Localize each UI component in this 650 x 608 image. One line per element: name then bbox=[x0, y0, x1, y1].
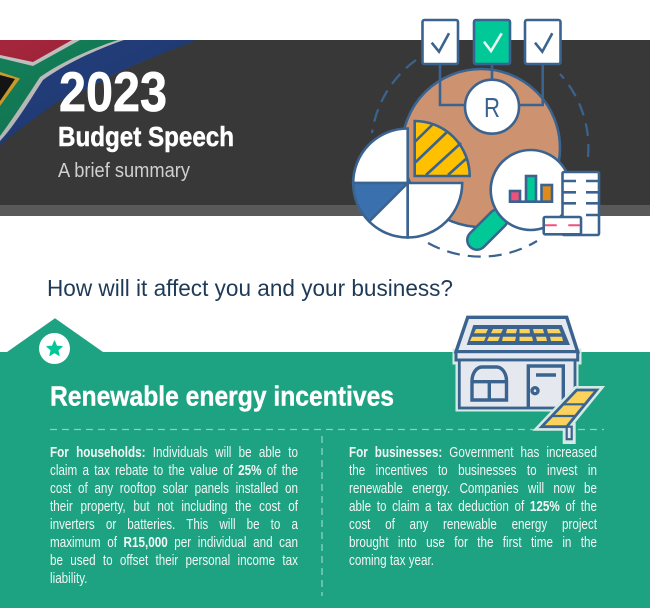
illustration: budget charts bbox=[353, 20, 599, 257]
subheading: How will it affect you and your business? bbox=[47, 275, 453, 301]
text block: businesses: coming tax year. bbox=[349, 553, 434, 569]
header band bbox=[0, 40, 650, 216]
gold hatched quarter bbox=[415, 121, 470, 176]
text block: businesses: For businesses: Government has increased bbox=[349, 445, 597, 461]
panel heading: Renewable energy incentives bbox=[50, 380, 394, 412]
text block: households: cost of any rooftop solar panels installed on bbox=[50, 481, 298, 497]
pie chart bbox=[353, 128, 462, 238]
text block: households: inverters or batteries. This will be to a bbox=[50, 517, 298, 533]
text block: businesses: able to claim a tax deduction of 125% of the bbox=[349, 499, 597, 515]
checkbox right bbox=[525, 20, 560, 64]
title: 2023: 2023 bbox=[59, 60, 167, 123]
rand circle bbox=[465, 80, 519, 134]
text block: households: their property, but not including the cost of bbox=[50, 499, 298, 515]
South African flag graphic bbox=[0, 40, 196, 145]
text block: businesses: the incentives to businesses to invest in bbox=[349, 463, 597, 479]
subtitle: A brief summary: A brief summary bbox=[58, 160, 190, 182]
tan circle bbox=[402, 69, 560, 227]
ledger table bbox=[562, 172, 599, 235]
connectors bbox=[440, 64, 543, 105]
text block: businesses: renewable energy. Companies will now be bbox=[349, 481, 597, 497]
text block: households bbox=[50, 445, 298, 587]
text block: households: liability. bbox=[50, 571, 87, 587]
text block: households: maximum of R15,000 per individual and can bbox=[50, 535, 298, 551]
icon: solar house bbox=[456, 317, 578, 408]
star badge bbox=[39, 333, 70, 364]
icon: solar panel on post bbox=[542, 390, 597, 440]
small card bbox=[544, 217, 581, 234]
text block: businesses bbox=[349, 445, 597, 569]
text block: households: be used to offset their personal income tax bbox=[50, 553, 298, 569]
bar chart bbox=[509, 176, 553, 202]
text block: households: claim a tax rebate to the value of 25% of the bbox=[50, 463, 298, 479]
title: Budget Speech: Budget Speech bbox=[58, 121, 234, 152]
text block: businesses: brought into use for the first time in the bbox=[349, 535, 597, 551]
rand circle: R bbox=[484, 92, 500, 123]
magnifier handle bbox=[477, 219, 498, 240]
teal panel with tab bbox=[0, 318, 650, 608]
checkbox middle bbox=[474, 20, 510, 64]
text block: businesses: cost of any renewable energy project bbox=[349, 517, 597, 533]
text block: households: For households: Individuals will be able to bbox=[50, 445, 298, 461]
checkbox left bbox=[422, 20, 458, 64]
magnifier lens bbox=[491, 150, 571, 230]
dashed orbit bbox=[372, 60, 588, 257]
